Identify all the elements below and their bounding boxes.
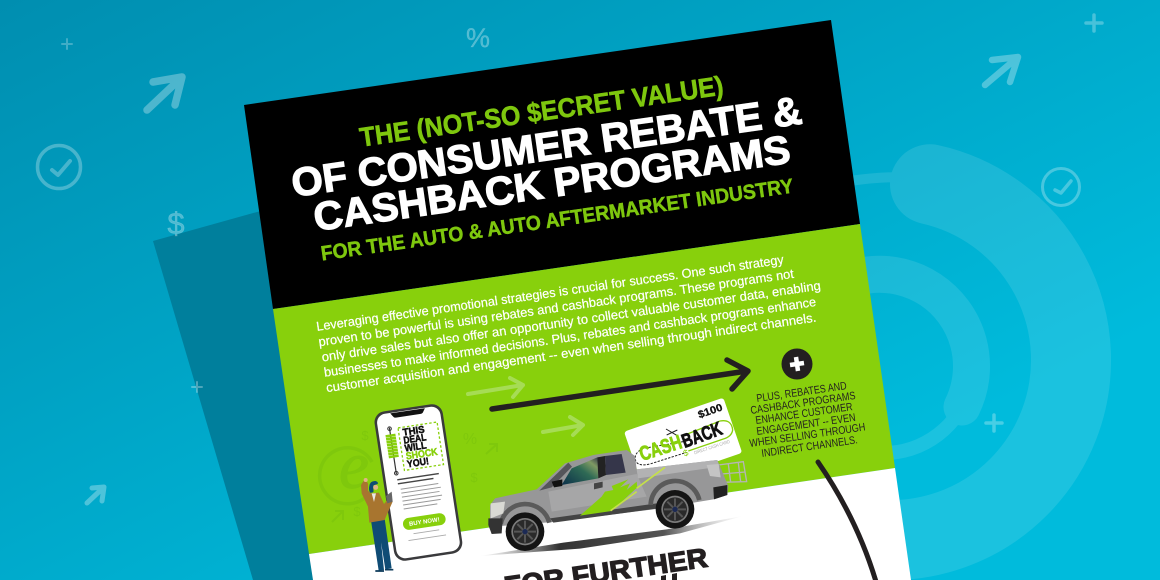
card scissors	[666, 429, 677, 436]
card body	[624, 398, 742, 487]
man hair and beard	[369, 481, 378, 493]
icon: ghost dollar signs: $	[361, 428, 369, 443]
man jacket	[361, 479, 393, 523]
callout: plus rebates text	[749, 380, 866, 460]
callout: plus rebates text: ENGAGEMENT -- EVEN	[756, 412, 856, 438]
callout: plus rebates text: ENHANCE CUSTOMER	[755, 401, 853, 427]
intro paragraph	[315, 247, 826, 395]
ad headline: THIS	[402, 424, 426, 439]
truck body	[490, 450, 728, 526]
truck side window	[562, 457, 598, 485]
ad body copy lines	[397, 473, 443, 510]
icon: dollar sign: $	[167, 206, 185, 241]
truck tail lamp	[707, 464, 721, 477]
man hand and phone	[386, 492, 393, 503]
icon: plus top right	[1086, 15, 1102, 31]
truck front wheel arch	[501, 504, 549, 524]
truck mirror	[552, 479, 562, 487]
icon: check circle right	[1042, 168, 1080, 206]
callout: plus rebates text: WHEN SELLING THROUGH	[749, 421, 866, 450]
truck window pillar	[597, 456, 606, 478]
man figure	[361, 478, 393, 571]
buy now button	[402, 512, 446, 531]
truck green graphic	[580, 479, 637, 516]
truck bed rail	[637, 460, 719, 478]
man raised hand	[364, 478, 368, 482]
card amount: $100	[697, 402, 725, 421]
icon: ghost dollar signs	[353, 428, 478, 519]
card dashed coupon outline	[635, 442, 687, 465]
icon: arrow top right	[985, 57, 1018, 85]
arrow: light green lower	[543, 417, 583, 435]
buy now button: BUY NOW!	[409, 517, 440, 528]
truck front wheel	[506, 512, 544, 551]
truck illustration	[480, 450, 747, 556]
phone notch	[390, 408, 426, 418]
ad headline: YOU!	[406, 456, 430, 470]
ad footer lines	[408, 529, 446, 541]
icon: ghost e-commerce symbol	[320, 427, 372, 504]
ad headline	[402, 423, 440, 470]
background icons	[38, 15, 1102, 503]
phone mockup	[373, 403, 464, 562]
arrow: curved black	[818, 462, 877, 580]
card word: cash: CASH	[637, 431, 685, 466]
icon: small plus top left	[62, 39, 72, 49]
card green outline	[683, 421, 733, 451]
intro paragraph: Leveraging effective promotional strategies is crucial for success. One such strategy	[315, 252, 785, 334]
cashback card	[624, 398, 742, 487]
title line: of consumer rebate: OF CONSUMER REBATE &	[289, 89, 805, 206]
truck windshield strip	[539, 463, 572, 491]
truck door handle	[594, 482, 603, 489]
ad headline: SHOCK	[405, 447, 439, 463]
ad headline: DEAL	[403, 432, 427, 447]
icon: plus lower right	[986, 415, 1002, 431]
page drop shadow	[153, 200, 400, 580]
panel: black title header	[244, 20, 860, 309]
intro paragraph: only drive sales but also offer an opportunity to collect valuable customer data, enabling	[321, 278, 822, 364]
ad dashed box	[398, 422, 443, 470]
icon: ghost dollar signs: $	[353, 504, 361, 519]
truck rear window	[605, 454, 626, 475]
ghost icons on green	[320, 427, 497, 522]
icon: ghost small arrows	[332, 444, 497, 522]
truck rear wheel arch	[651, 481, 699, 505]
lower heading second line fragment	[661, 573, 677, 580]
panel: green intro	[273, 224, 895, 554]
icon: ghost dollar signs: $	[470, 470, 478, 485]
icon: ghost e-commerce symbol: e	[339, 427, 369, 503]
title line: cashback programs: CASHBACK PROGRAMS	[311, 128, 793, 240]
panel: white lower section	[309, 468, 911, 580]
truck rear bumper	[713, 485, 727, 499]
man face	[373, 485, 378, 490]
truck front bumper	[488, 518, 503, 534]
title text block	[284, 60, 814, 268]
icon: percent sign: %	[466, 23, 490, 53]
icon: arrow bottom left	[87, 487, 104, 503]
intro paragraph: proven to be powerful is using rebates and cashback programs. These programs not	[317, 266, 795, 349]
man shirt	[372, 493, 376, 502]
shock absorber icon	[384, 426, 401, 476]
truck rocker panel	[550, 503, 658, 523]
intro paragraph: businesses to make informed decisions. Plus, rebates and cashback programs enhance	[323, 294, 817, 380]
truck grille and headlight	[491, 502, 505, 518]
truck body highlight	[548, 474, 647, 512]
card dollar mark: $	[682, 447, 690, 458]
truck rear wheel	[656, 490, 694, 529]
icon: arrow top left	[147, 77, 182, 110]
man shoes	[375, 570, 393, 571]
truck lime stripe	[611, 467, 665, 511]
truck rear rack	[718, 462, 747, 482]
callout: plus rebates text: CASHBACK PROGRAMS	[750, 390, 856, 417]
card small caption: DIRECT CASH CARD	[693, 439, 731, 455]
ad headline: WILL	[404, 440, 427, 455]
arrow: light green upper	[468, 378, 523, 397]
icon: check circle left	[38, 146, 80, 188]
card word: back: BACK	[679, 419, 725, 453]
icon: small plus lower left	[192, 382, 202, 392]
phone screen	[376, 406, 461, 559]
man pants	[371, 519, 392, 571]
callout: plus rebates text: PLUS, REBATES AND	[756, 380, 848, 405]
title line: the not-so secret value: THE (NOT-SO $ECRET VALUE)	[358, 71, 725, 153]
subtitle: auto industry: FOR THE AUTO & AUTO AFTERMARKET INDUSTRY	[319, 175, 795, 265]
decorative concentric rings	[801, 177, 1071, 540]
arrow: main black	[492, 360, 748, 409]
callout: plus rebates text: INDIRECT CHANNELS.	[761, 434, 858, 460]
intro paragraph: customer acquisition and engagement -- even when selling through indirect channels.	[325, 310, 817, 395]
icon: plus circle	[782, 348, 812, 380]
icon: ghost percent: %	[463, 431, 477, 448]
truck ground shadow	[480, 516, 743, 556]
phone frame	[373, 403, 464, 562]
